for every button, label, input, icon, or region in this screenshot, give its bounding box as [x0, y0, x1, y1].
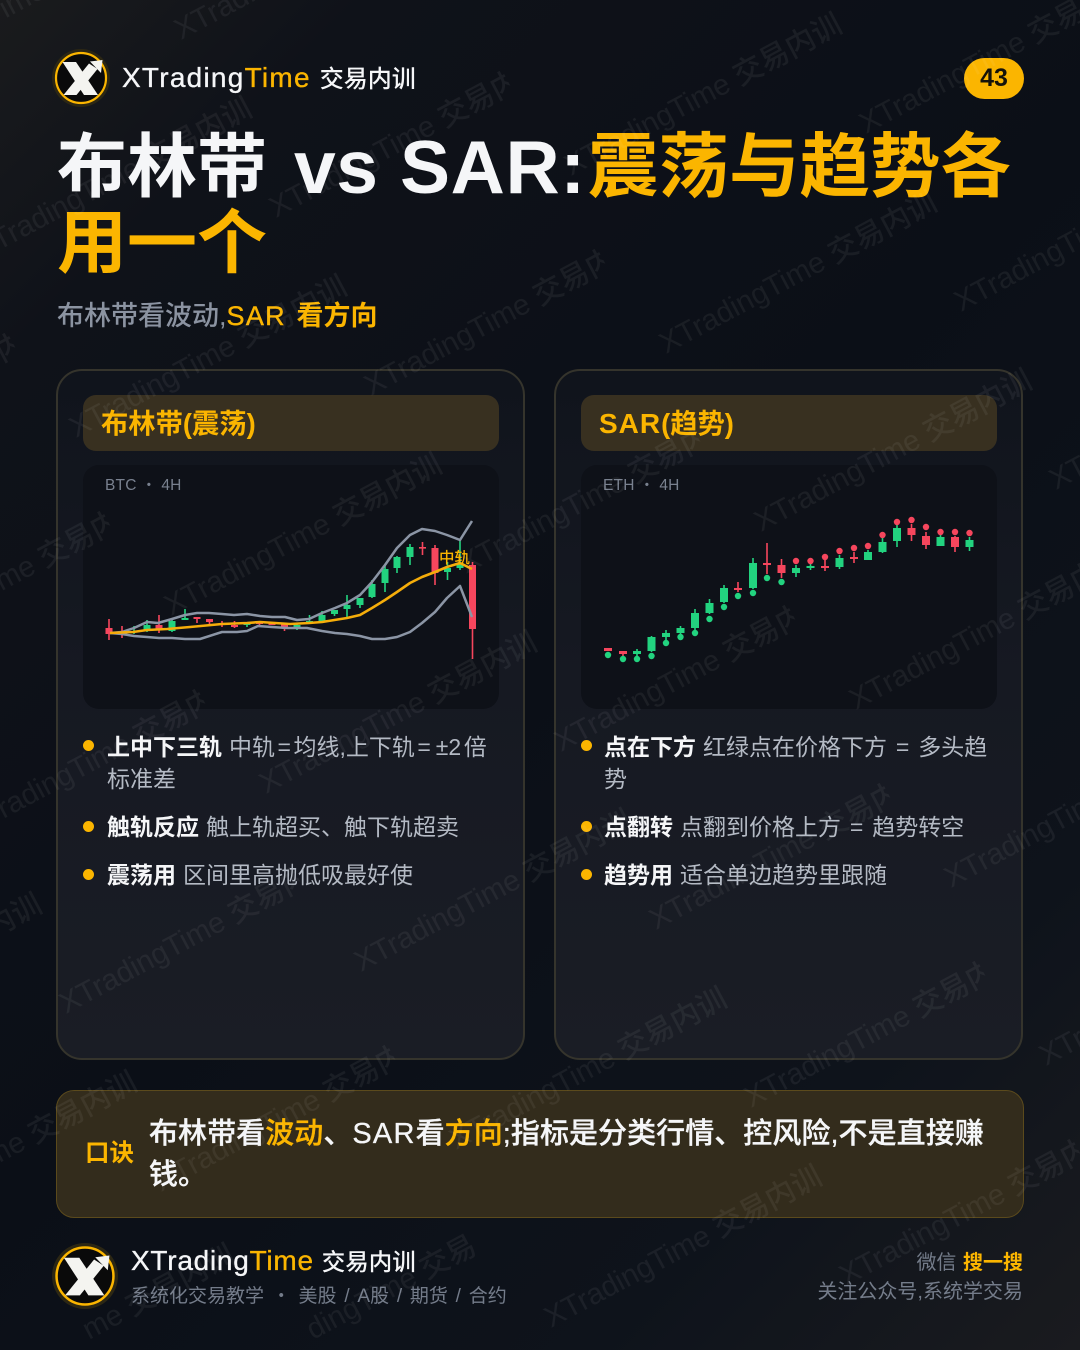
callout: mnemonic	[56, 1090, 1024, 1218]
panel heading: bollinger: 布林带(震荡)	[101, 408, 256, 439]
panel heading: sar: SAR(趋势)	[599, 408, 734, 439]
watermark: XTradingTime 交易内训	[654, 186, 942, 360]
chart: bollinger candlesticks: BTC ・ 4H	[105, 477, 182, 494]
chart: sar candlesticks: ETH ・ 4H	[603, 477, 680, 494]
bullet 2: 点翻转 点翻到价格上方 = 趋势转空	[604, 814, 964, 840]
callout text: 布林带看波动、SAR看方向;指标是分类行情、控风险,不是直接赚	[149, 1118, 984, 1150]
title: vs SAR:	[294, 125, 586, 209]
watermark: XTradingTime 交易内训	[254, 626, 542, 800]
chart: bollinger candlesticks	[83, 465, 499, 709]
footer tagline: 系统化交易教学 ・ 美股 / A股 / 期货 / 合约	[131, 1286, 507, 1307]
watermark: dingTime 交易	[301, 1229, 482, 1346]
footer brand name: XTradingTime 交易内训	[131, 1245, 416, 1276]
bullet 1: 上中下三轨 中轨=均线,上下轨=±2倍	[107, 734, 487, 760]
footer logo	[52, 1243, 118, 1309]
watermark: XTradingTime 交易内训	[159, 448, 447, 622]
watermark: XTradingTime 交易内训	[739, 940, 1027, 1114]
bullet 1	[581, 734, 987, 792]
bullet 3: 震荡用 区间里高抛低吸最好使	[107, 862, 413, 888]
callout text: 钱。	[149, 1159, 207, 1191]
bullets: bollinger	[83, 734, 487, 888]
bullets: sar	[581, 734, 987, 888]
header brand name: XTradingTime 交易内训	[122, 62, 416, 93]
watermark: XTradingTime 交易内训	[559, 8, 847, 182]
title: 布林带	[57, 128, 267, 206]
title: 震荡与趋势各	[588, 127, 1011, 206]
chart: bollinger candlesticks: 中轨	[439, 549, 471, 567]
title: 用一个	[57, 204, 267, 282]
header logo	[52, 49, 110, 107]
watermark: me 交易内训	[77, 1239, 240, 1346]
bullet 3: 趋势用 适合单边趋势里跟随	[604, 862, 887, 888]
watermark: XTradingTime 交易内训	[64, 270, 352, 444]
watermark: XTradingTime 交易内训	[454, 406, 742, 580]
subtitle: 布林带看波动,SAR 看方向	[57, 301, 377, 331]
watermark: XTradingTime 交易内训	[264, 50, 552, 224]
watermark: XTradingTime 交易内训	[54, 846, 342, 1020]
watermark: XTradingTime 交易内训	[359, 228, 647, 402]
footer wechat: 微信 搜一搜	[916, 1252, 1023, 1274]
issue number badge	[964, 58, 1024, 99]
title	[57, 125, 1011, 282]
footer follow note: 关注公众号,系统学交易	[817, 1281, 1023, 1303]
chart: sar candlesticks	[581, 465, 997, 709]
panel heading: sar	[581, 395, 997, 451]
panel: bollinger	[56, 369, 525, 1060]
bullet 1	[83, 734, 487, 792]
bullet 1: 点在下方 红绿点在价格下方 = 多头趋	[604, 734, 987, 760]
watermark: XTradingTime 交易内训	[149, 1024, 437, 1198]
bullet 1: 标准差	[107, 766, 176, 792]
panel: sar	[554, 369, 1023, 1060]
callout label: 口诀	[85, 1140, 134, 1167]
bullet 2: 触轨反应 触上轨超买、触下轨超卖	[107, 814, 459, 840]
callout text	[149, 1118, 984, 1191]
watermark: XTradingTime 交易内训	[749, 364, 1037, 538]
watermark: XTradingTime 交易内训	[349, 804, 637, 978]
watermark: XTradingTime 交易内训	[539, 1160, 827, 1334]
watermark: XTradingTime 交易内训	[644, 762, 932, 936]
bullet 1: 势	[604, 766, 627, 792]
watermark: XTradingTime 交易内训	[444, 982, 732, 1156]
panel heading: bollinger	[83, 395, 499, 451]
issue number badge: 43	[980, 64, 1008, 92]
watermark: XTradingTime 交易内训	[549, 584, 837, 758]
